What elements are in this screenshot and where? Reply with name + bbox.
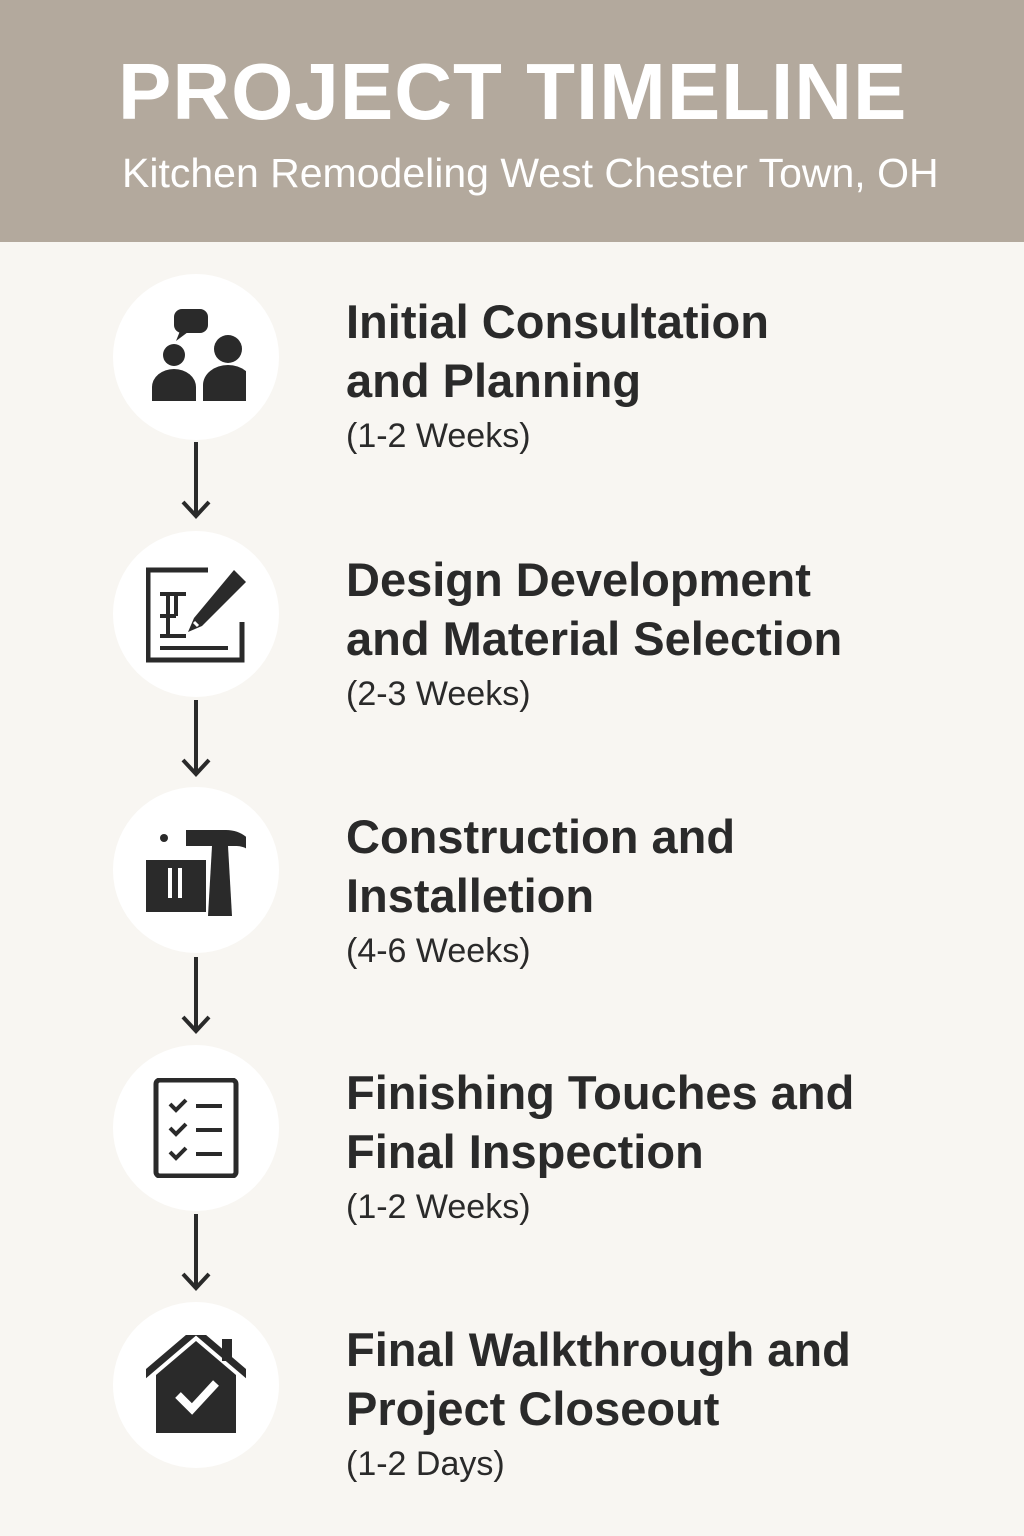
- arrow 2: [182, 700, 210, 777]
- step 4 text: Final Inspection: [346, 1125, 704, 1178]
- step 3 text: [346, 810, 735, 970]
- step 2 text: (2-3 Weeks): [346, 675, 531, 713]
- step 5 text: Project Closeout: [346, 1382, 719, 1435]
- step 1 text: (1-2 Weeks): [346, 417, 531, 455]
- step 4 text: Finishing Touches and: [346, 1066, 854, 1119]
- subtitle: Kitchen Remodeling West Chester Town, OH: [122, 150, 939, 196]
- step 5 text: (1-2 Days): [346, 1445, 505, 1483]
- icon: consultation: [113, 274, 279, 440]
- arrow 4: [182, 1214, 210, 1291]
- arrow 1: [182, 442, 210, 519]
- step 2 text: [346, 553, 842, 713]
- step 2 text: Design Development: [346, 553, 811, 606]
- step 1 text: and Planning: [346, 354, 641, 407]
- icon: construction: [113, 787, 279, 953]
- step 3 text: Installetion: [346, 869, 594, 922]
- step 3 text: Construction and: [346, 810, 735, 863]
- icon: design: [113, 531, 279, 697]
- arrow 3: [182, 957, 210, 1034]
- step 4 text: [346, 1066, 854, 1226]
- icon: house check: [113, 1302, 279, 1468]
- step 1 text: Initial Consultation: [346, 295, 769, 348]
- step 5 text: [346, 1323, 851, 1483]
- step 4 text: (1-2 Weeks): [346, 1188, 531, 1226]
- step 5 text: Final Walkthrough and: [346, 1323, 851, 1376]
- icon: checklist: [113, 1045, 279, 1211]
- header: [0, 0, 1024, 242]
- step 2 text: and Material Selection: [346, 612, 842, 665]
- step 3 text: (4-6 Weeks): [346, 932, 531, 970]
- title: PROJECT TIMELINE: [118, 47, 907, 136]
- step 1 text: [346, 295, 769, 455]
